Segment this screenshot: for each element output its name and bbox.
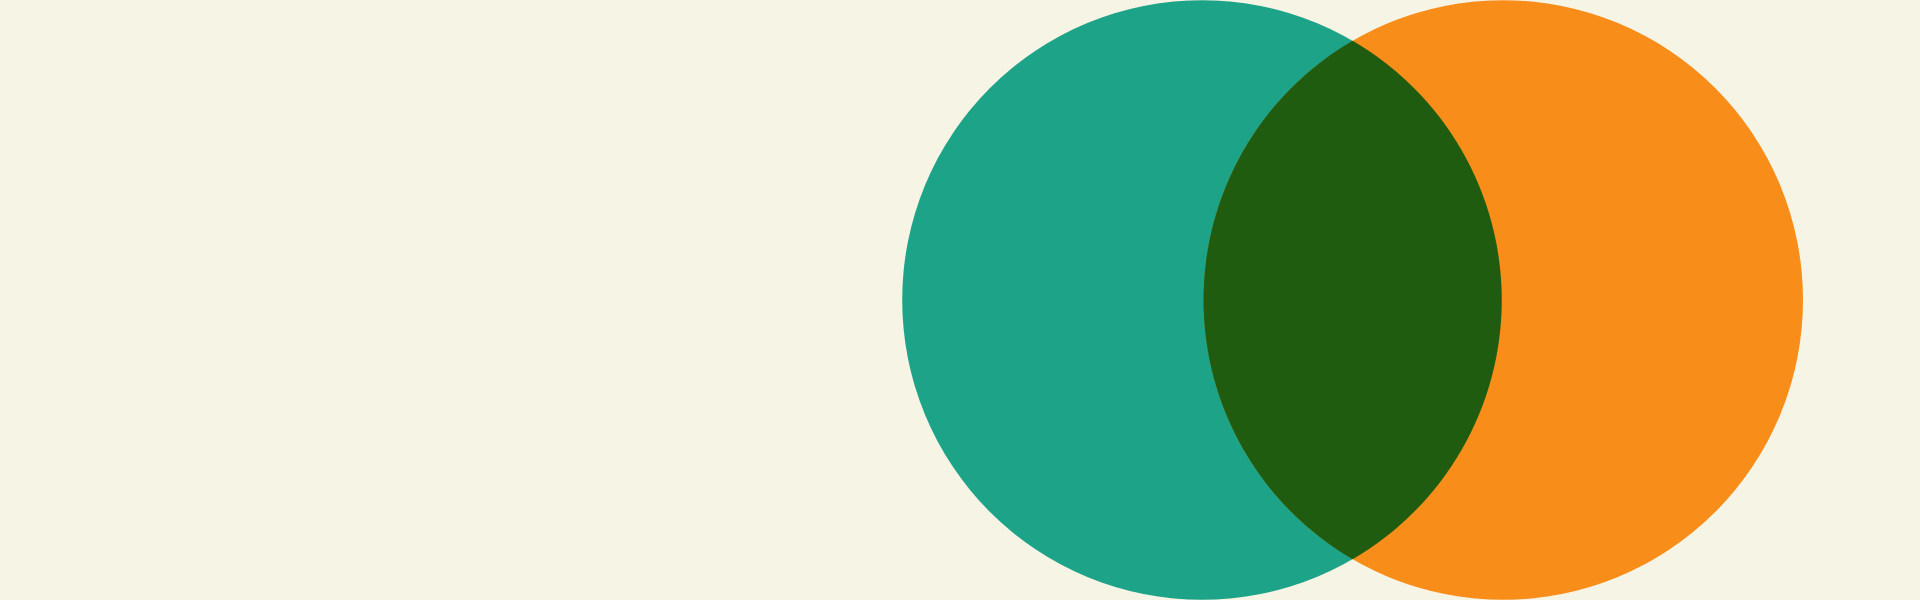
overlap: dark green lens [1203,41,1502,559]
circle: teal [902,0,1502,600]
circle: orange [1203,0,1803,600]
